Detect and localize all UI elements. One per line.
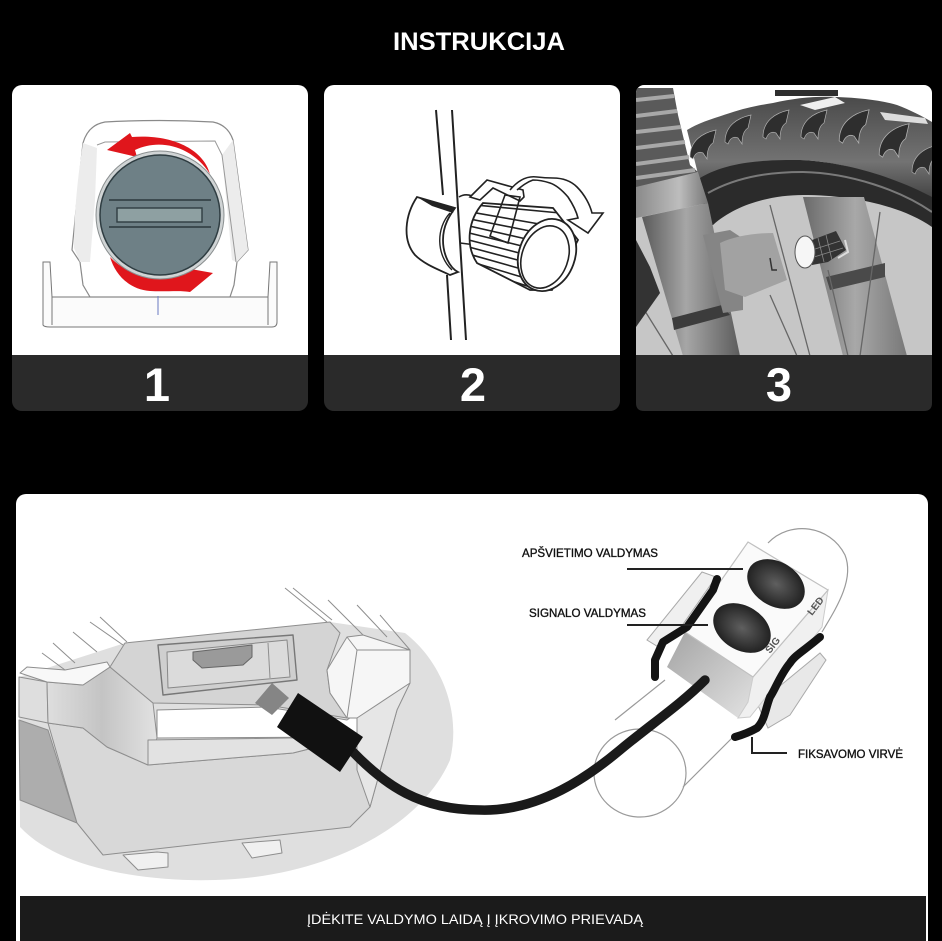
illustration: light <box>812 231 846 265</box>
panel: step 2 <box>324 85 620 411</box>
illustration: frame tube <box>436 110 466 340</box>
illustration: battery cover disc <box>96 151 224 279</box>
illustration: USB cable <box>255 680 705 810</box>
leader: signal control <box>627 624 708 626</box>
illustration: fork collar <box>636 172 708 218</box>
illustration: knurled knob <box>468 202 579 292</box>
illustration: tire <box>687 97 932 205</box>
illustration: feet <box>123 852 168 870</box>
button engraving SIG: SIG <box>764 635 783 656</box>
illustration: micro USB port <box>193 645 252 668</box>
illustration: clip <box>407 197 458 275</box>
illustration: rim <box>700 160 932 227</box>
illustration: control box <box>647 542 828 728</box>
footer bar <box>636 355 932 411</box>
icon: signal button <box>713 603 771 653</box>
footer bar <box>20 896 926 941</box>
illustration: sensor mount <box>703 230 745 313</box>
illustration: grey halo <box>19 622 453 880</box>
illustration: fork bellows <box>636 88 698 190</box>
title: INSTRUKCIJA <box>393 28 565 56</box>
footer bar <box>12 355 308 411</box>
panel: wiring diagram <box>16 494 928 941</box>
illustration: charging port frame <box>158 635 297 695</box>
illustration: light housing <box>72 120 248 297</box>
step number: 1 <box>144 358 170 411</box>
footer bar <box>324 355 620 411</box>
icon: rotation arrow <box>510 177 603 233</box>
illustration: charging head unit <box>19 588 410 870</box>
step number: 2 <box>460 358 486 411</box>
illustration: vents <box>42 588 410 670</box>
illustration: handlebar tube <box>594 529 848 817</box>
illustration: mount base <box>43 262 277 327</box>
illustration: fixing straps <box>655 579 820 737</box>
label: light control: APŠVIETIMO VALDYMAS <box>522 545 658 560</box>
label: signal control: SIGNALO VALDYMAS <box>529 606 646 620</box>
illustration: strap <box>470 180 524 201</box>
panel: step 3 <box>636 85 938 411</box>
illustration: spokes <box>640 205 880 356</box>
step number: 3 <box>766 358 792 411</box>
icon: light button <box>747 559 805 609</box>
button engraving LED: LED <box>806 595 827 618</box>
illustration: left fork <box>642 203 740 356</box>
label: fixing strap: FIKSAVOMO VIRVĖ <box>798 747 903 761</box>
leader: light control <box>627 568 743 570</box>
illustration: bracket <box>458 194 472 245</box>
illustration: right fork <box>803 197 907 356</box>
panel: step 1 <box>12 85 308 411</box>
icon: red rotation arrow top <box>107 133 210 174</box>
illustration: wheel behind left fork <box>636 240 660 327</box>
icon: red rotation arrow bottom <box>110 257 213 292</box>
footer caption: ĮDĖKITE VALDYMO LAIDĄ Į ĮKROVIMO PRIEVADĄ <box>307 912 644 927</box>
illustration: tire tread <box>690 97 938 174</box>
leader: fixing strap <box>752 737 787 753</box>
